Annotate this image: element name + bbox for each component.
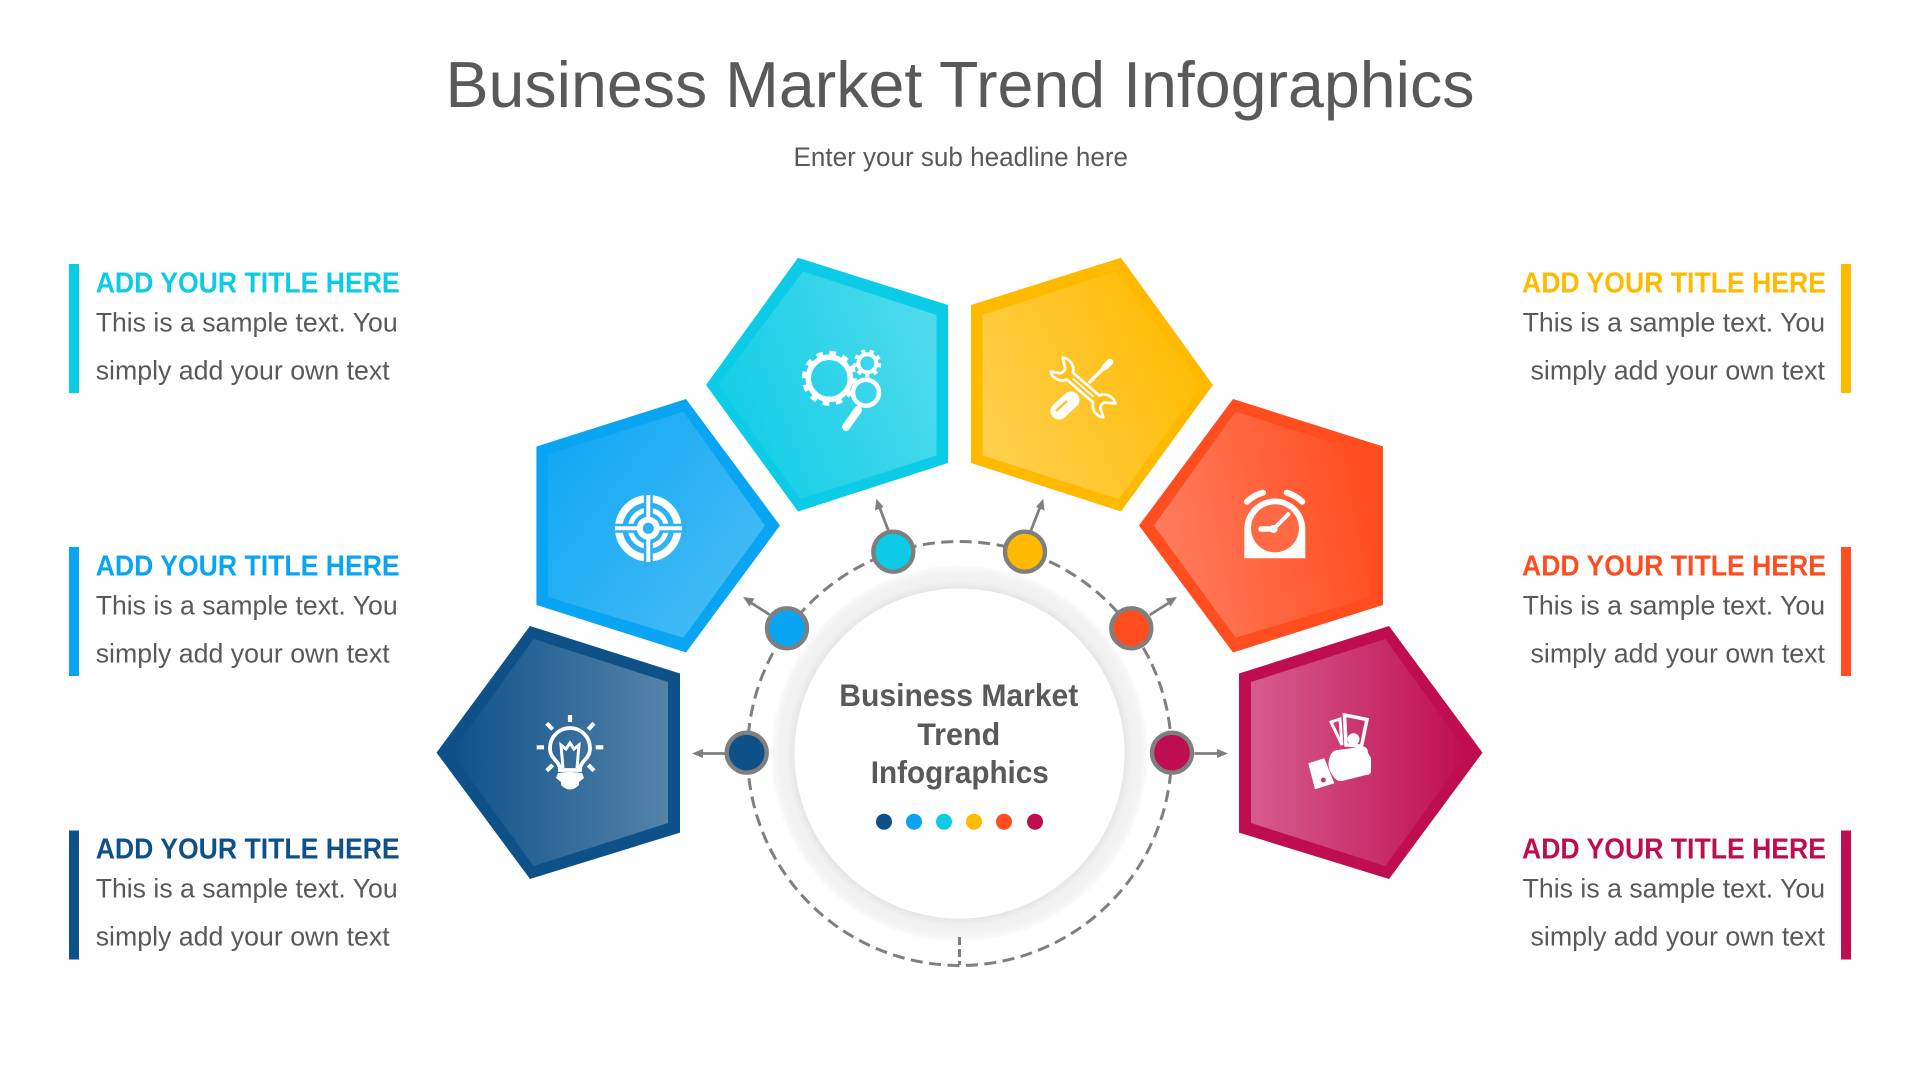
pentagon: cyan with gears icon <box>706 258 948 512</box>
text block: left top (cyan): This is a sample text. You <box>96 308 398 338</box>
text block: right bottom (crimson) <box>1522 830 1851 960</box>
center heading <box>839 677 1079 790</box>
colour dots <box>876 814 1043 830</box>
icon: gears and magnifier <box>804 351 879 427</box>
node: crimson <box>1152 733 1192 773</box>
text block: right middle (orange): simply add your own text <box>1530 638 1825 668</box>
text block: right middle (orange): ADD YOUR TITLE HERE <box>1522 550 1826 582</box>
text block: left middle (blue): This is a sample text. You <box>96 591 398 621</box>
arrow: yellow <box>1031 499 1044 530</box>
title: Business Market Trend Infographics <box>446 48 1474 121</box>
text block: right bottom (crimson): This is a sample text. You <box>1523 874 1825 904</box>
icon: hand holding money <box>1308 715 1371 789</box>
text block: left middle (blue): simply add your own text <box>96 638 390 668</box>
center white circle <box>794 588 1124 918</box>
text block: right top (yellow): ADD YOUR TITLE HERE <box>1522 267 1826 299</box>
pentagon: navy with bulb icon <box>436 626 680 879</box>
icon: light bulb <box>537 715 603 790</box>
icon: target <box>611 491 686 566</box>
arrow: orange <box>1150 597 1177 615</box>
text block: left bottom (navy): This is a sample text. You <box>96 874 398 904</box>
text block: right bottom (crimson): ADD YOUR TITLE HERE <box>1522 833 1826 865</box>
text block: left bottom (navy) <box>69 830 400 960</box>
text block: left middle (blue): ADD YOUR TITLE HERE <box>96 550 400 582</box>
node: orange <box>1111 608 1151 648</box>
arrow: navy <box>692 749 725 758</box>
bottom tick <box>958 937 961 965</box>
pentagon: blue with target icon <box>536 399 780 652</box>
text block: right middle (orange) <box>1522 547 1851 676</box>
text block: left middle (blue) <box>69 547 400 676</box>
text block: right top (yellow) <box>1522 264 1851 393</box>
icon: wrench and screwdriver <box>1049 356 1117 419</box>
pentagon: orange with clock icon <box>1139 399 1383 652</box>
text block: left top (cyan) <box>69 264 400 393</box>
text block: left bottom (navy): simply add your own text <box>96 921 390 951</box>
arrow: blue <box>743 597 770 615</box>
icon: alarm clock <box>1244 493 1305 558</box>
dashed ring <box>748 542 1172 966</box>
text block: left top (cyan): simply add your own text <box>96 355 390 385</box>
center ring <box>770 564 1148 942</box>
center heading: Business Market <box>839 677 1079 713</box>
node: cyan <box>873 532 913 572</box>
text block: right middle (orange): This is a sample text. You <box>1523 591 1825 621</box>
text block: right top (yellow): This is a sample text. You <box>1523 308 1825 338</box>
node: yellow <box>1005 532 1045 572</box>
center heading: Trend <box>917 716 1000 752</box>
pentagon: crimson with money icon <box>1239 626 1482 879</box>
subtitle: Enter your sub headline here <box>794 142 1128 172</box>
arrow: cyan <box>875 499 888 530</box>
node: blue <box>767 608 807 648</box>
text block: left bottom (navy): ADD YOUR TITLE HERE <box>96 833 400 865</box>
text block: right bottom (crimson): simply add your own text <box>1530 921 1825 951</box>
pentagon: yellow with tools icon <box>971 258 1213 512</box>
node: navy <box>727 733 767 773</box>
text block: left top (cyan): ADD YOUR TITLE HERE <box>96 267 400 299</box>
center heading: Infographics <box>871 754 1049 790</box>
arrow: crimson <box>1194 749 1228 758</box>
text block: right top (yellow): simply add your own text <box>1530 355 1825 385</box>
